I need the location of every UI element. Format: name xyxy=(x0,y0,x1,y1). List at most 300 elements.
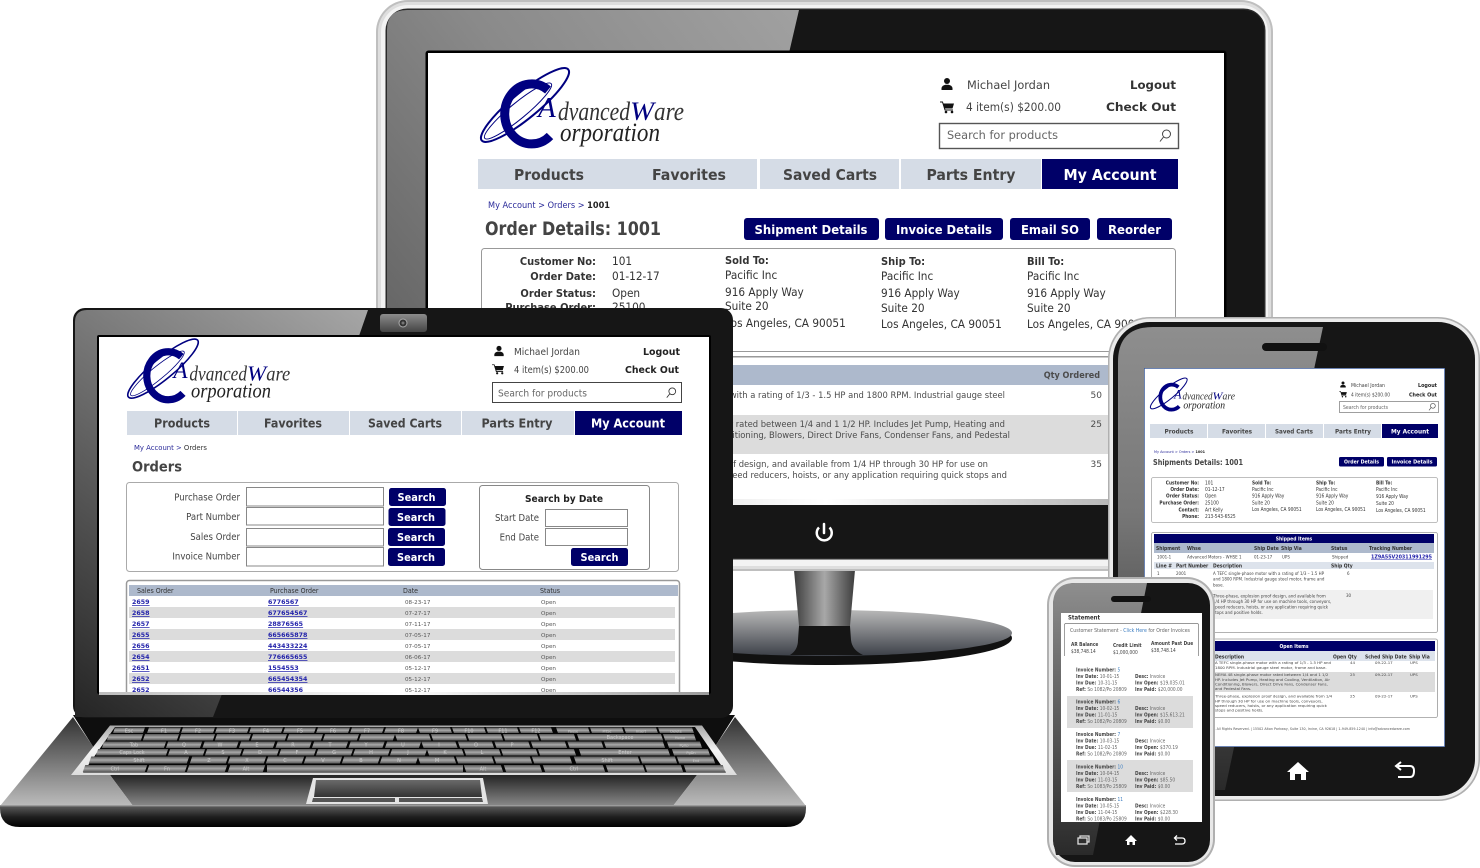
laptop account links xyxy=(492,346,680,376)
laptop orders table: 1554553 xyxy=(268,665,299,672)
tablet order info panel: Suite 20 xyxy=(1316,500,1334,506)
tablet order info panel: 01-12-17 xyxy=(1205,487,1225,493)
tablet logo xyxy=(1150,378,1235,412)
monitor screen: order details page xyxy=(428,53,1224,499)
tablet nav bar xyxy=(1150,424,1438,438)
laptop orders table: 443433224 xyxy=(268,643,308,650)
laptop search by date box: End Date xyxy=(500,532,539,544)
tablet order info panel: 916 Apply Way xyxy=(1316,494,1349,500)
tablet nav bar: My Account xyxy=(1391,428,1429,436)
tablet order info panel: Contact: xyxy=(1178,508,1199,514)
laptop search by date box: Search xyxy=(580,552,618,564)
tablet shipped items panel: 30 xyxy=(1346,593,1352,598)
monitor action buttons: Invoice Details xyxy=(896,222,992,237)
monitor order info panel: 916 Apply Way xyxy=(881,286,960,300)
key labels: L xyxy=(481,750,484,756)
phone invoice list: Inv Date: 10-04-15 xyxy=(1076,771,1120,777)
key labels: F1 xyxy=(161,728,167,734)
tablet open items panel: Conditioning, Blowers, Direct Drive Fans, Condenser Fans, xyxy=(1215,682,1328,686)
laptop screen: orders page xyxy=(99,332,709,710)
tablet shipped items panel: Advanced Motors - WHSE 1 xyxy=(1187,554,1242,560)
tablet order info panel: 916 Apply Way xyxy=(1376,494,1409,500)
monitor order info panel: Los Angeles, CA 90051 xyxy=(881,317,1002,331)
monitor order info panel: Sold To: xyxy=(725,254,769,267)
tablet order info panel: Los Angeles, CA 90051 xyxy=(1252,507,1302,513)
monitor order items table: Air Conditioning, Blowers, Direct Drive Fans, Condenser Fans, and Pedestal xyxy=(697,430,1010,440)
monitor logo: dvanced xyxy=(558,97,631,126)
key labels: Alt xyxy=(243,766,249,772)
tablet logo: are xyxy=(1223,391,1235,403)
monitor order items table: NEMA 48 single-phase motor rated between 1/4 and 1 1/2 HP. Includes Jet Pump, Heating and xyxy=(612,419,1005,429)
key labels: Shift xyxy=(601,758,613,764)
tablet order info panel: Order Status: xyxy=(1166,494,1199,500)
tablet body xyxy=(1108,317,1480,801)
tablet shipped items panel: 1 xyxy=(1157,571,1160,576)
monitor order items table: A TEFC single-phase motor with a rating of 1/3 - 1.5 HP and 1800 RPM. Industrial gauge steel xyxy=(614,390,1005,400)
tablet open items panel xyxy=(1215,638,1438,718)
monitor logo xyxy=(473,59,684,151)
key labels: Esc xyxy=(125,728,134,734)
laptop orders table: 2657 xyxy=(132,621,150,628)
laptop orders table: Open xyxy=(541,644,556,650)
phone invoice list: Desc: Invoice xyxy=(1135,738,1166,744)
key labels: F7 xyxy=(364,728,370,734)
laptop orders table: 07-05-17 xyxy=(405,644,431,650)
tablet shipped items panel: and 1800 RPM. Industrial gauge steel motor, frame and xyxy=(1213,576,1325,582)
key labels: Home xyxy=(675,736,685,740)
key labels: F3 xyxy=(229,728,235,734)
key labels: Ctrl xyxy=(111,766,119,772)
laptop nav bar: Saved Carts xyxy=(368,416,442,430)
laptop logo: A xyxy=(171,358,188,384)
key labels: F xyxy=(296,750,299,756)
laptop orders table: 07-05-17 xyxy=(405,633,431,639)
tablet order info panel: Los Angeles, CA 90051 xyxy=(1376,508,1426,514)
laptop orders table: 05-12-17 xyxy=(405,688,431,694)
monitor nav bar: Parts Entry xyxy=(926,166,1016,184)
tablet logo: orporation xyxy=(1183,399,1225,411)
phone balance summary: AR Balance xyxy=(1071,642,1098,648)
monitor action buttons xyxy=(744,218,1172,240)
key labels: F9 xyxy=(432,728,438,734)
tablet shipped items panel: 6 xyxy=(1347,571,1350,576)
laptop account links: Check Out xyxy=(625,365,679,376)
monitor order info panel: Purchase Order: xyxy=(505,301,596,314)
tablet open items panel: 09-22-17 xyxy=(1375,660,1393,665)
phone invoice list: Desc: Invoice xyxy=(1135,804,1166,810)
laptop orders table xyxy=(126,580,680,692)
monitor action buttons: Reorder xyxy=(1108,222,1161,237)
tablet shipped items panel: 01-23-17 xyxy=(1254,554,1273,560)
laptop orders table: Open xyxy=(541,633,556,639)
key labels: Delete xyxy=(670,730,682,734)
tablet action buttons: Order Details xyxy=(1344,460,1379,466)
phone balance summary: $38,748.14 xyxy=(1071,649,1096,655)
tablet open items panel: Three-phase, explosion proof design, and available from 1/4 xyxy=(1214,694,1333,698)
key labels: Y xyxy=(363,742,368,748)
phone invoice list: Desc: Invoice xyxy=(1135,771,1166,777)
tablet shipped items panel: 1Z9A55V20311991295 xyxy=(1371,554,1432,560)
laptop orders table: 2656 xyxy=(132,643,150,650)
tablet open items panel: Open Items xyxy=(1279,644,1309,650)
tablet order info panel: Order Date: xyxy=(1170,487,1199,493)
monitor action buttons: Email SO xyxy=(1021,222,1079,237)
key labels: Z xyxy=(207,758,211,764)
tablet order info panel xyxy=(1152,478,1438,522)
tablet order info panel: Pacific Inc xyxy=(1376,487,1398,493)
laptop orders table: 6776567 xyxy=(268,599,299,606)
tablet shipped items panel: Shipment xyxy=(1156,546,1181,552)
laptop logo: W xyxy=(247,363,268,386)
tablet speaker xyxy=(1262,343,1327,351)
tablet open items panel: Ship Via xyxy=(1409,654,1430,660)
phone body xyxy=(1047,577,1215,867)
phone invoice list: Inv Due: 10-31-15 xyxy=(1076,680,1118,686)
laptop orders table: Open xyxy=(541,622,556,628)
tablet order info panel: 101 xyxy=(1205,480,1213,486)
tablet logo: dvanced xyxy=(1183,391,1213,403)
phone invoice list: Inv Due: 11-03-15 xyxy=(1076,778,1118,784)
laptop breadcrumb: My Account > Orders xyxy=(134,444,207,452)
tablet order info panel: Art Kelly xyxy=(1205,508,1223,514)
tablet account links: Check Out xyxy=(1409,392,1438,398)
laptop logo: are xyxy=(266,363,290,386)
phone screen: statement page xyxy=(1060,613,1202,822)
tablet open items panel: HP through 30 HP for use on machine tools, conveyors, xyxy=(1215,698,1323,704)
laptop orders table: 06-06-17 xyxy=(405,655,431,661)
monitor account links: Logout xyxy=(1130,78,1176,92)
phone balance summary: Credit Limit xyxy=(1113,643,1142,649)
monitor nav bar: My Account xyxy=(1064,166,1157,184)
laptop orders table: Sales Order xyxy=(137,587,174,595)
key labels: F8 xyxy=(398,728,404,734)
tablet order info panel: Sold To: xyxy=(1252,480,1271,486)
laptop search form panel xyxy=(126,482,678,572)
tablet open items panel: Sched Ship Date xyxy=(1365,654,1407,660)
laptop base xyxy=(0,715,806,827)
laptop logo: dvanced xyxy=(189,363,247,386)
monitor nav bar: Products xyxy=(514,166,584,184)
laptop orders table: Purchase Order xyxy=(270,587,319,595)
tablet action buttons: Invoice Details xyxy=(1392,460,1433,466)
monitor search box xyxy=(940,124,1178,148)
phone invoice list: Inv Due: 11-01-15 xyxy=(1076,712,1118,718)
monitor order items table: 25 xyxy=(1091,420,1102,430)
monitor order info panel: Suite 20 xyxy=(1027,301,1071,315)
key labels: Shift xyxy=(133,758,145,764)
monitor stand xyxy=(638,570,1012,665)
monitor breadcrumb: My Account > Orders > 1001 xyxy=(488,201,610,211)
icon: phone home xyxy=(1125,835,1137,845)
phone invoice list: Desc: Invoice xyxy=(1135,706,1166,712)
laptop orders table: Open xyxy=(541,600,556,606)
phone invoice list: Invoice Number: 10 xyxy=(1076,764,1123,770)
tablet open items panel: NEMA 48 single-phase motor rated between 1/4 and 1 1/2 xyxy=(1215,672,1329,677)
tablet shipped items panel: Shipped Items xyxy=(1276,536,1313,542)
monitor order info panel: 916 Apply Way xyxy=(1027,286,1106,300)
tablet shipped items panel: Ship Qty xyxy=(1331,564,1353,570)
tablet shipped items panel: Ship Date xyxy=(1254,546,1279,552)
key labels: P xyxy=(510,742,514,748)
tablet order info panel: Customer No: xyxy=(1166,480,1199,486)
key labels: End xyxy=(693,759,699,763)
laptop orders table: 2652 xyxy=(132,676,150,683)
key labels: O xyxy=(474,742,478,748)
laptop logo xyxy=(126,338,290,404)
monitor order info panel: Order Status: xyxy=(520,287,596,300)
key labels: W xyxy=(218,742,223,748)
tablet account links: Michael Jordan xyxy=(1351,383,1385,389)
phone invoice list: Ref: So 1082/Po 20809 xyxy=(1076,687,1127,693)
phone invoice list: Inv Due: 11-02-15 xyxy=(1076,745,1118,751)
key labels: F4 xyxy=(263,728,269,734)
monitor order info panel: Open xyxy=(612,286,640,300)
monitor account links: Michael Jordan xyxy=(967,78,1050,92)
key labels xyxy=(111,728,699,772)
laptop lid xyxy=(73,308,733,718)
phone invoice list: Invoice Number: 6 xyxy=(1076,700,1120,706)
phone invoice list: Inv Open: $19,035.01 xyxy=(1135,680,1185,686)
laptop search by date box xyxy=(480,486,650,570)
monitor order info panel: Order Date: xyxy=(530,270,596,283)
monitor order info panel: Pacific Inc xyxy=(1027,269,1079,283)
monitor account links: 4 item(s) $200.00 xyxy=(966,100,1061,114)
key labels: V xyxy=(321,758,325,764)
key labels: T xyxy=(327,742,332,748)
icon: tablet home xyxy=(1287,762,1309,780)
phone invoice list: Inv Date: 10-01-15 xyxy=(1076,674,1120,680)
monitor order info panel: Suite 20 xyxy=(881,301,925,315)
monitor order info panel: 101 xyxy=(612,254,632,268)
phone invoice list: Inv Date: 10-05-15 xyxy=(1076,804,1120,810)
laptop nav bar: Products xyxy=(154,416,210,430)
key labels: C xyxy=(283,758,287,764)
key labels: Backspace xyxy=(607,735,633,741)
tablet order info panel: Ship To: xyxy=(1316,480,1336,486)
laptop orders table: 665454354 xyxy=(268,676,308,683)
monitor body xyxy=(376,0,1273,571)
monitor order items table: Three-phase, explosion proof design, and available from 1/4 HP through 30 HP for use on xyxy=(613,459,988,469)
phone heading: Statement xyxy=(1068,614,1100,622)
laptop orders table: 2652 xyxy=(132,687,150,694)
tablet open items panel: stops and positive holds. xyxy=(1215,708,1263,712)
phone invoice list: Inv Paid: $20,000.00 xyxy=(1135,687,1183,693)
key labels: U xyxy=(401,742,405,748)
monitor nav bar: Favorites xyxy=(652,166,726,184)
phone invoice list: Invoice Number: 7 xyxy=(1076,732,1120,738)
phone invoice list: Inv Paid: $0.00 xyxy=(1135,816,1170,822)
laptop search by date box: Search by Date xyxy=(525,494,603,505)
laptop account links: 4 item(s) $200.00 xyxy=(514,365,589,376)
laptop orders table: Open xyxy=(541,655,556,661)
tablet open items panel: A TEFC single-phase motor with a rating of 1/3 - 1.5 HP and xyxy=(1215,660,1332,665)
laptop orders table: 2655 xyxy=(132,632,150,639)
monitor nav bar xyxy=(478,159,1178,189)
tablet shipped items panel: Status xyxy=(1331,546,1348,552)
phone invoice list: Desc: Invoice xyxy=(1135,674,1166,680)
laptop search box: Search for products xyxy=(498,388,588,400)
phone invoice list: Inv Paid: $0.00 xyxy=(1135,784,1170,790)
monitor order info panel: Los Angeles, CA 90051 xyxy=(1027,317,1148,331)
laptop orders table: Open xyxy=(541,611,556,617)
tablet order info panel: Los Angeles, CA 90051 xyxy=(1316,507,1366,513)
tablet order info panel: Purchase Order: xyxy=(1159,500,1199,506)
tablet open items panel: UPS xyxy=(1410,660,1418,665)
tablet order info panel: Pacific Inc xyxy=(1316,487,1338,493)
tablet account links xyxy=(1339,382,1438,412)
monitor order info panel: 01-12-17 xyxy=(612,269,660,283)
tablet order info panel: Suite 20 xyxy=(1376,501,1394,507)
monitor order items table: speed reducers, hoists, or any application requiring quick stops and xyxy=(723,470,1007,480)
laptop search box xyxy=(492,382,682,402)
phone invoice list: Inv Date: 10-03-15 xyxy=(1076,738,1120,744)
tablet open items panel: 25 xyxy=(1350,694,1355,698)
tablet open items panel: and Pedestal Fans. xyxy=(1215,686,1251,691)
tablet open items panel: Description xyxy=(1215,654,1244,660)
monitor order info panel: Customer No: xyxy=(520,255,596,268)
laptop orders table: 2651 xyxy=(132,665,150,672)
tablet order info panel: Pacific Inc xyxy=(1252,487,1274,493)
tablet shipped items panel: base. xyxy=(1213,582,1224,588)
tablet shipped items panel: Ship Via xyxy=(1281,546,1302,552)
monitor order info panel: Pacific Inc xyxy=(881,269,933,283)
monitor order items table: 35 xyxy=(1091,460,1102,470)
key labels: Enter xyxy=(618,750,633,756)
tablet logo: A xyxy=(1173,387,1182,401)
monitor order items table: 50 xyxy=(1091,391,1102,401)
tablet nav bar: Saved Carts xyxy=(1275,428,1313,436)
phone invoice list: Inv Open: $228.30 xyxy=(1135,810,1178,816)
phone balance summary xyxy=(1064,623,1199,656)
phone invoice list: Invoice Number: 11 xyxy=(1076,797,1123,803)
tablet open items panel: UPS xyxy=(1410,672,1418,677)
laptop orders table: 665665878 xyxy=(268,632,307,639)
laptop orders table: 07-27-17 xyxy=(405,611,431,617)
tablet account links: Search for products xyxy=(1343,405,1389,411)
phone balance summary: Amount Past Due xyxy=(1151,641,1193,647)
laptop account links: Logout xyxy=(643,347,680,358)
key labels: E xyxy=(255,742,259,748)
tablet shipped items panel: Tracking Number xyxy=(1369,546,1413,552)
laptop nav bar: Favorites xyxy=(264,416,322,430)
key labels: A xyxy=(184,750,188,756)
laptop keyboard xyxy=(71,726,737,775)
monitor logo: W xyxy=(630,97,657,126)
tablet shipped items panel: 2001 xyxy=(1176,571,1187,576)
tablet shipped items panel: 1001-1 xyxy=(1157,554,1172,560)
monitor logo: orporation xyxy=(560,118,660,147)
monitor order info panel: Pacific Inc xyxy=(725,268,777,282)
tablet open items panel: Open Qty xyxy=(1333,654,1357,660)
laptop search form panel: Search xyxy=(397,512,435,524)
tablet open items panel: 09-22-17 xyxy=(1375,694,1393,698)
monitor order info panel: Bill To: xyxy=(1027,255,1064,268)
tablet shipped items panel xyxy=(1152,532,1438,632)
tablet nav bar: Parts Entry xyxy=(1335,428,1371,436)
tablet order info panel: 213-543-6525 xyxy=(1205,514,1236,520)
phone speaker xyxy=(1111,596,1151,602)
key labels: G xyxy=(332,750,336,756)
monitor order info panel: 916 Apply Way xyxy=(725,285,804,299)
laptop search form panel: Search xyxy=(397,552,435,564)
laptop touchpad xyxy=(306,778,488,804)
key labels: Fn xyxy=(164,766,170,772)
key labels: J xyxy=(406,750,409,756)
laptop search by date box: Start Date xyxy=(495,513,539,524)
laptop orders table: 677654567 xyxy=(268,610,307,617)
tablet shipped items panel: speed reducers, hoists, or any application requiring quick xyxy=(1213,604,1329,610)
phone invoice list: Inv Paid: $0.00 xyxy=(1135,719,1170,725)
key labels: M xyxy=(435,758,439,764)
tablet screen: shipment details page xyxy=(1144,368,1445,747)
tablet open items panel: HP. Includes Jet Pump, Heating and Cooling, Ventilation, Air xyxy=(1215,677,1330,682)
key labels: N xyxy=(397,758,401,764)
tablet shipped items panel: 1/4 HP through 30 HP for use on machine tools, conveyors, xyxy=(1213,599,1331,604)
monitor account links: Check Out xyxy=(1106,100,1176,114)
key labels: B xyxy=(359,758,363,764)
laptop orders table: 28876565 xyxy=(268,621,303,628)
laptop orders table: 2659 xyxy=(132,599,150,606)
laptop orders table: Date xyxy=(403,587,418,595)
monitor logo: are xyxy=(654,97,684,126)
laptop search form panel: Invoice Number xyxy=(172,552,240,562)
tablet account links: 4 item(s) $200.00 xyxy=(1351,392,1390,398)
key labels: Caps Lock xyxy=(119,750,145,756)
key labels: Q xyxy=(182,742,186,748)
laptop nav bar: Parts Entry xyxy=(482,416,552,430)
key labels: Insert xyxy=(636,730,647,734)
phone balance summary: $1,000,000 xyxy=(1113,650,1138,656)
tablet shipped items panel: Part Number xyxy=(1176,564,1209,570)
phone balance summary: Customer Statement - Click Here for Order Invoices xyxy=(1070,628,1190,634)
monitor search box: Search for products xyxy=(947,128,1058,142)
laptop orders table: 776665655 xyxy=(268,654,307,661)
monitor order info panel: Los Angeles, CA 90051 xyxy=(725,316,846,330)
monitor order info panel xyxy=(482,248,1176,352)
tablet open items panel: 1800 RPM. Industrial gauge steel motor, frame and base. xyxy=(1215,665,1327,670)
key labels: H xyxy=(369,750,373,756)
monitor order info panel: Ship To: xyxy=(881,255,925,268)
key labels: F10 xyxy=(464,728,474,734)
tablet open items panel: 09-22-17 xyxy=(1375,672,1393,677)
phone invoice list: Ref: So 1082/Po 20809 xyxy=(1076,752,1127,758)
laptop orders table: Open xyxy=(541,666,556,672)
keys xyxy=(83,728,725,772)
laptop search form panel: Search xyxy=(397,532,435,544)
tablet shipped items panel: Description xyxy=(1213,564,1242,570)
tablet shipped items panel: Whse xyxy=(1187,546,1201,552)
laptop orders table: 07-11-17 xyxy=(405,622,431,628)
monitor logo: A xyxy=(536,92,556,124)
tablet account links: Logout xyxy=(1418,383,1438,389)
key labels: PgUp xyxy=(679,744,689,748)
phone invoice list xyxy=(1067,668,1193,822)
laptop orders table: 2654 xyxy=(132,654,150,661)
icon: laptop webcam xyxy=(380,314,427,332)
monitor account links xyxy=(940,78,1176,114)
tablet open items panel: 44 xyxy=(1350,660,1355,665)
key labels: S xyxy=(221,750,225,756)
laptop nav bar: My Account xyxy=(591,416,665,430)
phone invoice list: Inv Open: $370.19 xyxy=(1135,745,1178,751)
key labels: F6 xyxy=(330,728,336,734)
tablet order info panel: Suite 20 xyxy=(1252,500,1270,506)
key labels: F11 xyxy=(498,728,508,734)
icon: phone recents xyxy=(1078,836,1089,844)
key labels: R xyxy=(291,742,295,748)
laptop orders table: 05-12-17 xyxy=(405,677,431,683)
tablet shipped items panel: stops and positive holds. xyxy=(1213,610,1263,615)
